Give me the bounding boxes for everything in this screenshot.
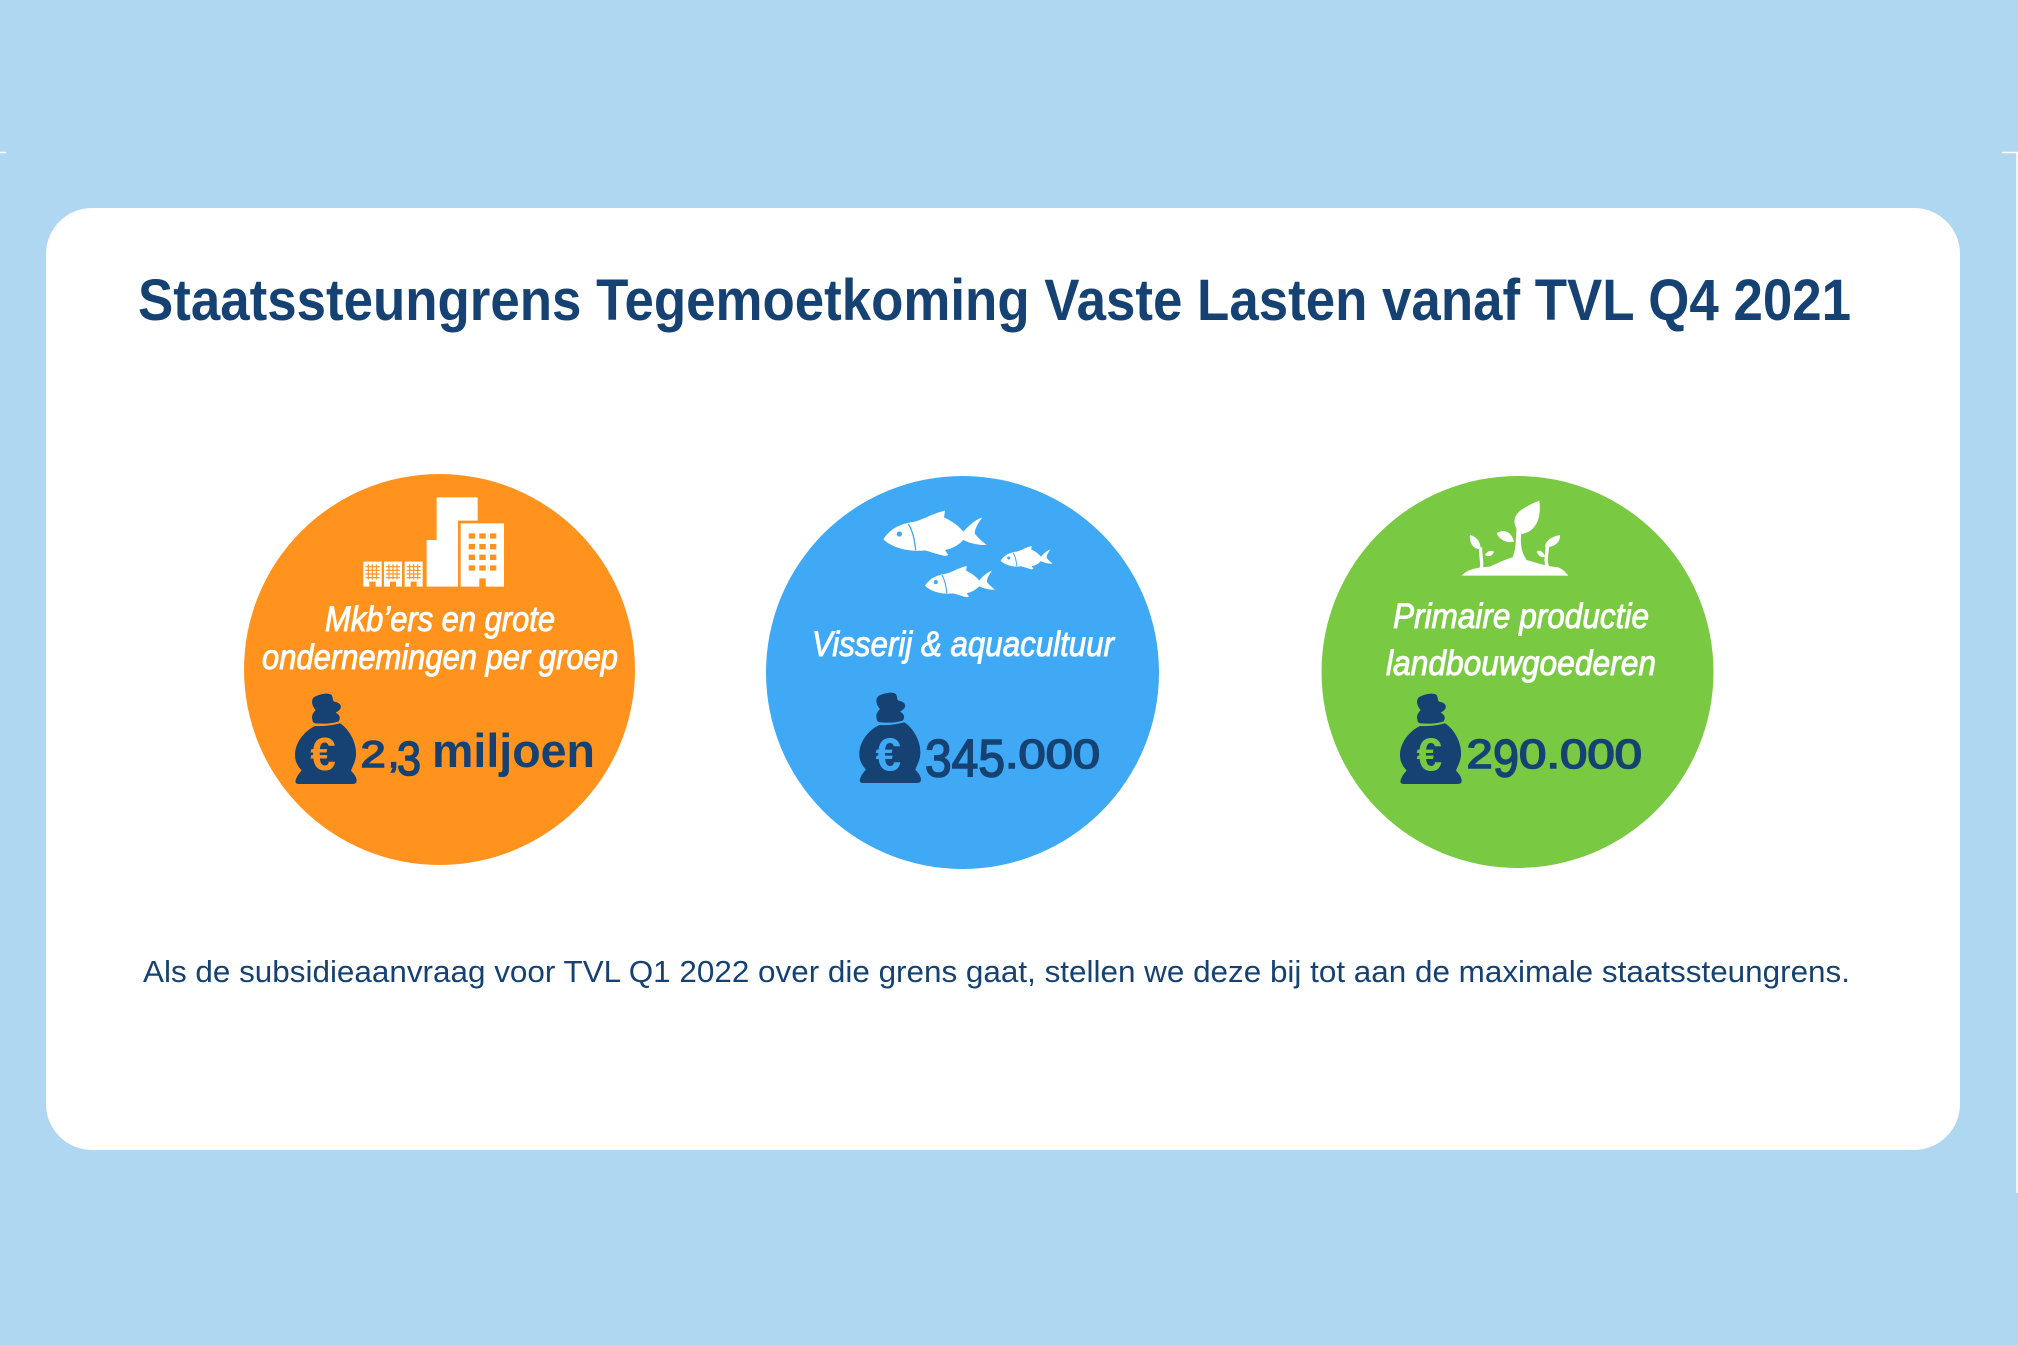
amount: 2,3 miljoen: , [388,732,399,776]
label: agriculture: landbouwgoederen [1386,644,1656,683]
panel: orange circle, companies [244,474,635,865]
panel: green circle, agriculture [1322,476,1714,868]
label: agriculture: Primaire productie [1393,597,1649,636]
label: companies: ondernemingen per groep [262,638,618,677]
amount: 345.000: 345 [925,730,1005,789]
euro sign: € [1417,728,1442,780]
panel: white card [46,208,1960,1150]
icon: fish [883,511,1053,597]
euro sign: € [876,728,901,780]
amount: 290.000: 2 [1467,731,1493,777]
footnote text: Als de subsidieaanvraag voor TVL Q1 2022 over die grens gaat, stellen we deze bij tot aan de maximale staatssteungrens. [143,954,1850,989]
amount: 2,3 miljoen: miljoen [432,724,595,777]
icon: buildings [363,497,504,587]
icon: money bag [1400,694,1462,784]
amount: 345.000: .000 [1005,731,1100,777]
amount: 290.000: 9 [1493,730,1519,789]
label: companies: Mkb’ers en grote [325,600,555,639]
euro sign: € [310,728,336,780]
icon: money bag [859,693,921,783]
icon: money bag [295,694,357,784]
label: fisheries: Visserij & aquacultuur [812,625,1115,664]
amount: 290.000: 0.000 [1519,731,1642,777]
amount: 2,3 miljoen: 3 [397,733,421,786]
icon: plants [1462,501,1568,576]
panel: blue circle, fisheries [766,476,1159,869]
title: Staatssteungrens Tegemoetkoming Vaste Lasten vanaf TVL Q4 2021 [138,268,1851,333]
amount: 2,3 miljoen: 2 [361,734,386,775]
